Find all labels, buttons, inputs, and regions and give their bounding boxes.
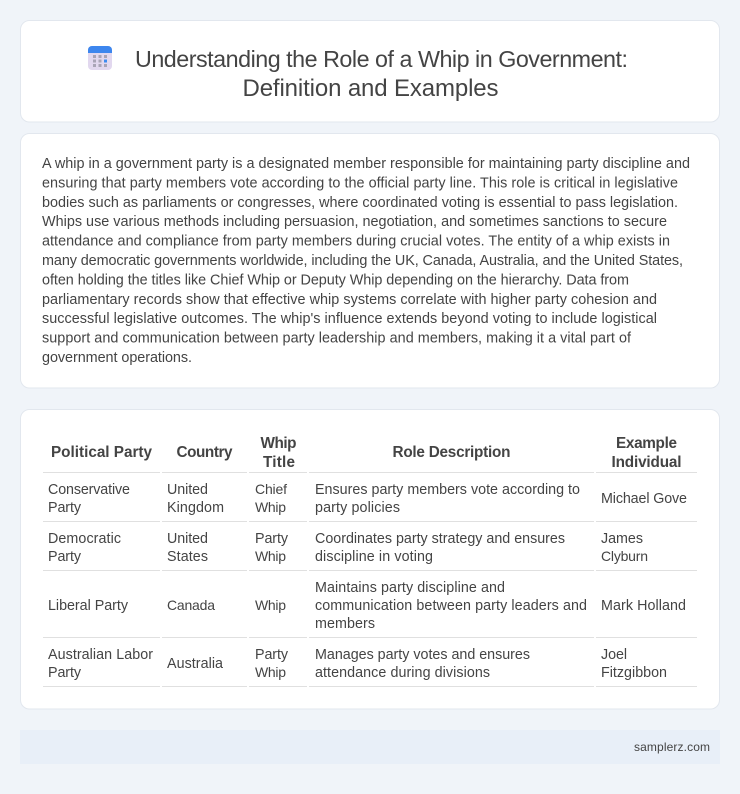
table row: Democratic Party: Coordinates party strategy and ensures — [315, 531, 565, 547]
table row: Democratic Party: discipline in voting — [315, 549, 433, 565]
table row: Liberal Party: Liberal Party — [48, 598, 129, 614]
table row: Australian Labor Party: Party — [255, 647, 289, 663]
table header row: Individual — [612, 454, 682, 471]
text block: whip description: successful legislative outcomes. The whip's influence extends beyond voting to include logistical — [42, 311, 657, 327]
table row: Democratic Party — [43, 531, 697, 571]
text block: whip description: often holding the titles like Chief Whip or Deputy Whip depending on the hierarchy. Data from — [42, 272, 629, 288]
table row: Australian Labor Party — [43, 647, 697, 687]
table row: Liberal Party: communication between party leaders and — [315, 598, 587, 614]
table row: Australian Labor Party: Manages party votes and ensures — [315, 647, 530, 663]
footer: samplerz.com — [634, 740, 710, 754]
table row: Democratic Party: Clyburn — [601, 548, 648, 564]
table row: Liberal Party: Mark Holland — [601, 598, 686, 614]
title — [135, 46, 628, 102]
table row: Democratic Party: Democratic — [48, 531, 121, 547]
table row: Democratic Party: United — [167, 531, 208, 547]
table row: Conservative Party: Whip — [255, 499, 286, 515]
text block: whip description — [42, 156, 690, 366]
table row: Australian Labor Party: Australian Labor — [48, 647, 153, 663]
icon: calendar — [88, 46, 112, 70]
text block: whip description: A whip in a government party is a designated member responsible for maintaining party discipline and — [42, 156, 690, 172]
table row: Democratic Party: Party — [48, 549, 82, 565]
table row: Conservative Party: Chief — [255, 481, 287, 497]
table row: Liberal Party — [43, 580, 697, 638]
table row: Conservative Party — [43, 481, 697, 522]
title: Understanding the Role of a Whip in Government: — [135, 46, 628, 72]
table row: Australian Labor Party: Fitzgibbon — [601, 665, 667, 681]
text block: whip description: many democratic governments worldwide, including the UK, Canada, Australia, and the United States, — [42, 253, 683, 269]
text block: whip description: parliamentary records show that effective whip systems correlate with higher party cohesion and — [42, 292, 657, 308]
table row: Democratic Party: Whip — [255, 548, 286, 564]
table header row: Role Description — [392, 444, 510, 461]
table row: Australian Labor Party: Joel — [601, 647, 627, 663]
table row: Australian Labor Party: Australia — [167, 656, 223, 672]
table row: Liberal Party: Whip — [255, 597, 286, 613]
table header row: Country — [176, 444, 233, 461]
table row: Australian Labor Party: Whip — [255, 664, 286, 680]
table header row: Title — [263, 454, 295, 471]
text block: whip description: ensuring that party members vote according to the official party line. This role is critical in legislative — [42, 175, 678, 191]
table — [43, 435, 697, 687]
table row: Liberal Party: Canada — [167, 597, 215, 613]
table row: Conservative Party: Kingdom — [167, 500, 224, 516]
text block: whip description: Whips use various methods including persuasion, negotiation, and sometimes sanctions to secure — [42, 214, 667, 230]
table row: Conservative Party: United — [167, 482, 208, 498]
table row: Conservative Party: Ensures party members vote according to — [315, 482, 580, 498]
panel: description — [20, 134, 720, 388]
table row: Democratic Party: Party — [255, 531, 289, 547]
table row: Conservative Party: Conservative — [48, 482, 130, 498]
text block: whip description: attendance and compliance from party members during crucial votes. The entity of a whip exists in — [42, 234, 670, 250]
panel: table card — [20, 410, 720, 709]
footer — [20, 730, 720, 764]
text block: whip description: bodies such as parliaments or congresses, where coordinated voting is essential to pass legislation. — [42, 195, 678, 211]
table header row: Example — [616, 435, 677, 452]
table row: Democratic Party: States — [167, 549, 208, 565]
table row: Conservative Party: Party — [48, 500, 82, 516]
table row: Australian Labor Party: attendance during divisions — [315, 665, 490, 681]
title: Definition and Examples — [242, 75, 498, 102]
text block: whip description: support and communication between party leadership and members, making it a vital part of — [42, 331, 632, 347]
table row: Australian Labor Party: Party — [48, 665, 82, 681]
table header row: Whip — [260, 435, 296, 452]
table header row: Political Party — [51, 444, 152, 461]
table row: Democratic Party: James — [601, 531, 643, 547]
panel: title header — [20, 20, 720, 122]
table header row — [43, 435, 697, 473]
table row: Conservative Party: Michael Gove — [601, 491, 687, 507]
table row: Liberal Party: members — [315, 616, 375, 632]
table row: Conservative Party: party policies — [315, 500, 400, 516]
table row: Liberal Party: Maintains party discipline and — [315, 580, 505, 596]
text block: whip description: government operations. — [42, 350, 192, 366]
